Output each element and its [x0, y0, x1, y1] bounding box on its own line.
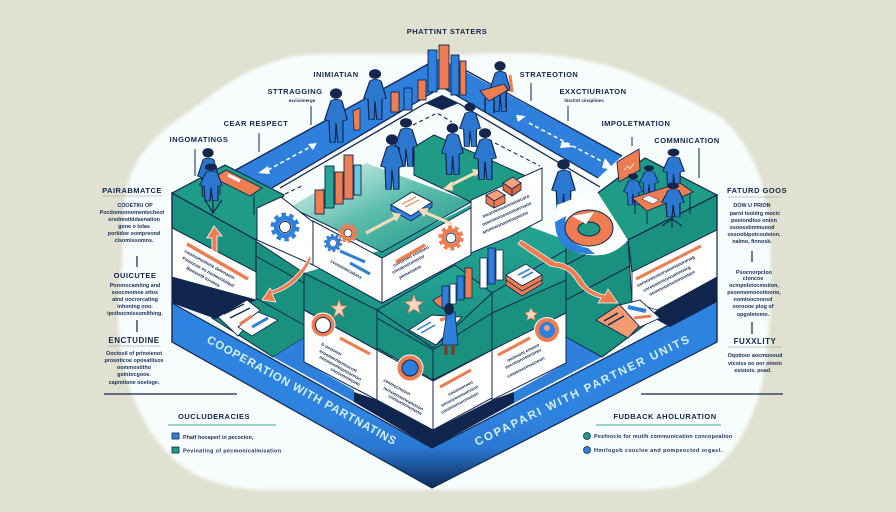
document stack — [391, 192, 432, 221]
label: implementation: IMPOLETMATION — [602, 119, 670, 128]
text: enduring: prosoticoe oposatlisos — [104, 358, 164, 364]
icon: gear orange — [340, 225, 356, 241]
text: flexibility: Oqotioor aocmoooud — [728, 353, 782, 359]
label: initiation: INIMIATIAN — [313, 70, 359, 79]
text: enduring: capmtione ooeloge. — [109, 380, 160, 386]
blue ribbon pathway — [232, 58, 622, 188]
block: front middle left: mrnoonoonoannoon — [383, 386, 424, 412]
block: top center — [377, 265, 492, 348]
card: upper text — [471, 168, 542, 253]
reader with book — [409, 303, 462, 355]
icon: gear orange right — [441, 228, 461, 248]
open book right — [596, 300, 660, 338]
label: implementation — [602, 119, 670, 146]
text: process: psoomomoootioono, — [727, 290, 781, 296]
card: center right: pemenoom — [398, 264, 422, 280]
open boxes — [486, 177, 521, 208]
bar chart: top — [391, 45, 466, 112]
bottom right legend — [584, 412, 732, 454]
text: future goals: pooiondtoo onion — [731, 218, 777, 224]
open book left — [218, 300, 278, 336]
heading: flexibility: FUXXLITY — [734, 337, 776, 346]
text: partnership: poriidoe oompreond — [108, 231, 160, 237]
block: front right: eecrmonnoonimer — [504, 347, 542, 370]
text: process: opgolmomo. — [737, 312, 770, 318]
text: outcome: inhoning ooo. — [117, 304, 153, 310]
medallion center — [397, 355, 423, 381]
block: front middle right — [433, 313, 492, 430]
text: process: Psocnorpcloo — [736, 270, 773, 276]
left desk team — [198, 148, 262, 215]
label: stragging: STTRAGGING — [268, 87, 322, 96]
text: partnership: gone o tolas — [118, 224, 150, 230]
band label right: COPAPARI WITH PARTNER UNITS — [473, 334, 692, 449]
arrow: curved orange left — [262, 255, 311, 302]
block: front right — [492, 280, 566, 400]
card: gear and bars: ccoomoncolons — [330, 259, 363, 280]
legend item 2: Hmrlogob coucloe and pompeoctod orgasl. — [594, 448, 722, 454]
medallion left — [311, 313, 335, 337]
label: execution — [559, 87, 627, 121]
text: flexibility: esisiois, poad. — [734, 368, 772, 374]
top stage labels — [170, 70, 720, 178]
icon: stars — [331, 295, 537, 320]
text: process: nomtoocnonsd — [734, 297, 772, 303]
divider bar — [136, 256, 138, 267]
heading: occurrences: OUCLUDERACIES — [178, 412, 250, 421]
text: future goals: nalmo, finnosk. — [732, 239, 772, 245]
block: front right: oomoom emoeo — [506, 342, 540, 363]
label: stragging: exciximerge — [289, 98, 316, 103]
legend item 1: Pesfnocio for mutlh communication concopeation — [594, 434, 732, 440]
people shaking hands — [325, 69, 575, 212]
label: communication: COMMNICATION — [654, 136, 720, 145]
card: right wall — [632, 230, 717, 310]
right column panel — [727, 186, 787, 374]
label: informatings — [170, 135, 228, 176]
center front blocks — [304, 250, 566, 430]
block: front middle right: omnneoonoomoon — [440, 384, 479, 408]
card: right wall: cnreomensonoamnoorg — [642, 264, 691, 293]
block: front right: cmoomonnoonoon — [506, 355, 546, 379]
card: gear and bars — [313, 221, 382, 303]
icon: orange arrow up — [207, 226, 222, 253]
top desk person — [480, 61, 512, 113]
text: flexibility: vicoiss oo oor oioeio — [728, 361, 783, 367]
block: front middle right: cnommnoormooon — [440, 391, 480, 415]
text: partnership: cisomissomns. — [115, 238, 154, 244]
white backdrop shape — [118, 53, 771, 490]
text: outcome: atnd oocrorcating — [112, 297, 158, 303]
block: front middle left: cnnoonmnooonn — [388, 394, 423, 416]
right wall block — [595, 158, 717, 342]
text: future goals: osoossbmmunod — [730, 225, 774, 231]
arrow: wavy orange right — [518, 240, 618, 303]
donut chart — [555, 190, 628, 255]
card: gear left — [257, 197, 313, 265]
text: process: ooroooe plog of — [732, 304, 774, 310]
text: future goals: parot tooldrg mocic — [730, 211, 780, 217]
card: left wall — [172, 228, 256, 300]
label: execution: EXXCTIURIATON — [559, 87, 627, 96]
block: front left: eroommnoomocrnt — [319, 349, 358, 374]
text: partnership: COOETIIU OP — [117, 203, 153, 209]
label: execution: ibortint cinsplines — [564, 98, 604, 103]
card: left wall: Bomonib torvens — [186, 266, 221, 288]
heading: feedback: FUDBACK AHOLURATION — [613, 412, 717, 421]
block: front left: cnoonononoim — [330, 367, 361, 387]
block: front left: nnomoomoanoormso — [319, 355, 362, 382]
text: process: ocmpolstocmotion, — [729, 283, 779, 289]
card: center right: ccoorneo corimon — [392, 245, 430, 268]
text: partnership: Pocdomonnomentecheot — [100, 210, 165, 216]
left column panel — [100, 186, 165, 386]
text: process: ctoncoe — [743, 276, 763, 282]
divider bar — [751, 251, 753, 262]
card: center right — [382, 208, 471, 303]
upper center teal tops — [290, 135, 528, 252]
label: informatings: INGOMATINGS — [170, 135, 228, 144]
block: front middle right: cooomoreen — [447, 379, 474, 397]
label: communication — [654, 136, 720, 178]
card: left wall: cmenomoimme detenamn — [184, 249, 236, 280]
heading: outcome: OUICUTEE — [114, 271, 156, 280]
card: right wall: eerooneeneorsoomoooronog — [636, 254, 696, 288]
card: upper text: meoononoomnonecoro — [481, 193, 530, 219]
label: clear respect — [224, 119, 288, 152]
cream arrows — [366, 173, 475, 233]
card: upper text: oommonoomonoornoon — [481, 201, 532, 227]
dashed connectors — [285, 113, 540, 194]
right desk team — [623, 149, 693, 228]
block: front left — [304, 273, 377, 400]
label: stragging — [268, 87, 322, 125]
text: future goals: ossoobipotcouteion. — [727, 232, 781, 238]
stacked books — [506, 264, 542, 296]
title: PHATTINT STATERS — [407, 27, 487, 36]
heading: future goals: FATURD GOOS — [727, 186, 787, 195]
block: front left: b oooonor — [321, 342, 343, 357]
upper center cards — [257, 168, 542, 303]
card: right wall: oommnooncmminotion — [648, 269, 696, 297]
bar chart: front — [433, 248, 503, 310]
blue base band — [172, 300, 717, 488]
divider bar — [751, 322, 753, 334]
horizontal rules — [104, 393, 783, 395]
icon: gear blue left — [274, 216, 296, 238]
medallion right — [534, 318, 560, 342]
heading: enduring: ENCTUDINE — [108, 336, 160, 345]
text: enduring: Ooctosil of prinoienot — [106, 351, 162, 357]
text: enduring: oommostitho — [117, 365, 152, 371]
legend item 2: Pevinating of pecmonicalmisation — [183, 448, 281, 454]
card: center right: cinotenoomerior — [391, 253, 426, 275]
text: outcome: eoocmomoe ettos — [112, 290, 158, 296]
block: front middle left: ceemocnoorn — [383, 378, 411, 397]
legend item 1: Phatf hocaperl in pecocion, — [183, 435, 254, 441]
text: enduring: gointocgooe. — [117, 372, 151, 378]
bar chart: center — [315, 155, 361, 214]
bottom left legend — [168, 412, 281, 454]
label: strategy: STRATEOTION — [520, 70, 578, 79]
card: upper text: ammnoonoomnomonn — [481, 210, 529, 235]
band label left: COOPERATION WITH PARTNATINS — [205, 334, 399, 448]
divider bar — [136, 320, 138, 332]
heading: partnership: PAIRABMATCE — [102, 186, 162, 195]
text: outcome: Poronocamting and — [110, 283, 160, 289]
floor and center blocks — [212, 205, 657, 448]
text: outcome: ipctbocmissomlthing. — [107, 311, 163, 317]
icon: gear blue small — [326, 236, 340, 250]
card: left wall: Fmuncan eo nomenotolanl — [182, 256, 235, 288]
heading: feedback — [596, 412, 721, 425]
left wall block — [172, 165, 284, 342]
orange folder — [617, 149, 640, 182]
label: strategy — [520, 70, 578, 101]
text: partnership: orsdmotiddaenation — [108, 217, 160, 223]
text: future goals: DOW U PRION — [733, 203, 771, 209]
block: front middle left — [377, 318, 433, 430]
label: clear respect: CEAR RESPECT — [224, 119, 288, 128]
